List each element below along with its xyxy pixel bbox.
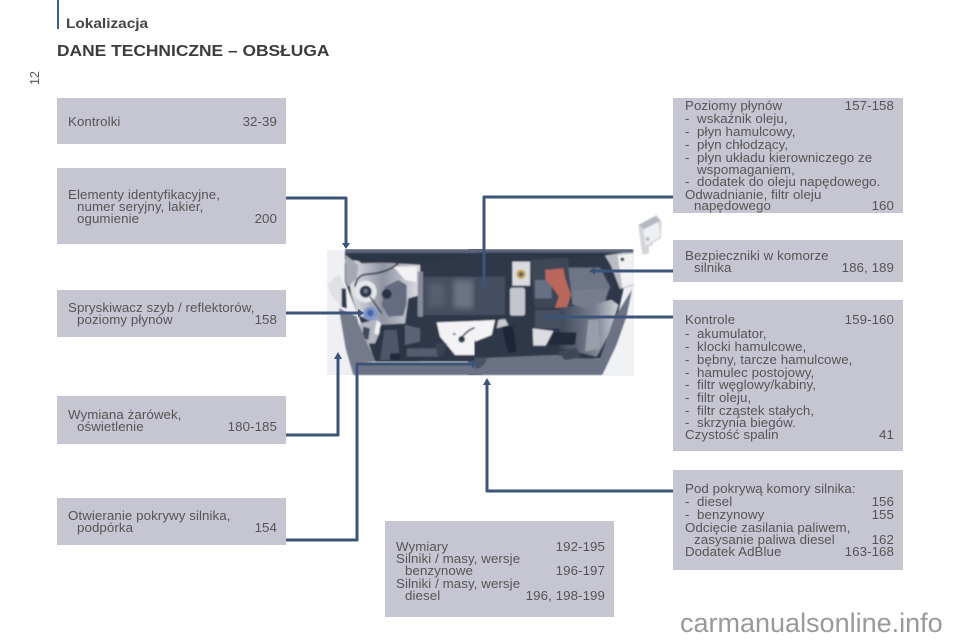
section label: Lokalizacja [66, 16, 148, 31]
panel: Elementy identyfikacyjne [57, 168, 286, 244]
panel: Poziomy płynów: - płyn układu kierowniczego ze [685, 150, 872, 165]
panel: Kontrole: Czystość spalin [685, 427, 779, 442]
arrow heads [334, 243, 595, 385]
panel: Wymiary: benzynowe [405, 563, 473, 578]
panel: Otwieranie pokrywy silnika: 154 [255, 520, 277, 535]
top band [358, 260, 385, 264]
panel: Poziomy płynów: wspomaganiem, [697, 162, 795, 177]
reservoir cap [512, 262, 530, 286]
panel: Bezpieczniki: silnika [694, 260, 732, 275]
panel: Pod pokrywą komory silnika: 156 [872, 494, 894, 509]
page edge line [57, 0, 59, 29]
panel: Bezpieczniki [673, 240, 903, 282]
panel: Wymiana żarówek: 180-185 [228, 419, 277, 434]
panel: Poziomy płynów: Odwadnianie, filtr oleju [685, 187, 821, 202]
panel: Poziomy płynów: - płyn chłodzący, [685, 137, 788, 152]
panel: Poziomy płynów: napędowego [694, 198, 771, 213]
panel: Otwieranie pokrywy silnika: podpórka [77, 520, 133, 535]
panel: Otwieranie pokrywy silnika [57, 498, 286, 545]
panel: Pod pokrywą komory silnika: - diesel [685, 494, 732, 509]
battery [530, 258, 571, 308]
panel: Poziomy płynów [673, 98, 903, 213]
right half of the bay [475, 249, 637, 377]
panel: Kontrole: 159-160 [845, 312, 894, 327]
panel: Wymiary: 196-197 [556, 563, 605, 578]
washer reservoir [358, 320, 380, 343]
panel: Spryskiwacz szyb [57, 290, 286, 337]
panel: Elementy identyfikacyjne: 200 [255, 211, 277, 226]
panel: Poziomy płynów: - płyn hamulcowy, [685, 124, 796, 139]
page number: 12 [28, 71, 42, 85]
left half of the bay [328, 249, 475, 375]
panel: Kontrole: - filtr cząstek stałych, [685, 403, 814, 418]
panel: Spryskiwacz szyb: poziomy płynów [77, 312, 173, 327]
panel: Poziomy płynów: - dodatek do oleju napędowego. [685, 174, 880, 189]
front panel [358, 364, 475, 375]
connector lines [285, 197, 673, 540]
panel: Bezpieczniki: 186, 189 [842, 260, 894, 275]
panel: Otwieranie pokrywy silnika: Otwieranie pokrywy silnika, [68, 508, 231, 523]
base [327, 250, 634, 375]
panel: Elementy identyfikacyjne: ogumienie [77, 211, 139, 226]
panel: Wymiary: Silniki / masy, wersje [396, 576, 520, 591]
panel: Wymiary: Wymiary [396, 539, 448, 554]
panel: Kontrolki [57, 98, 286, 144]
panel: Pod pokrywą komory silnika: - benzynowy [685, 507, 764, 522]
title: DANE TECHNICZNE – OBSŁUGA [57, 43, 329, 60]
panel: Kontrole: Kontrole [685, 312, 735, 327]
panel: Pod pokrywą komory silnika: Dodatek AdBlue [685, 544, 781, 559]
panel: Kontrole: - bębny, tarcze hamulcowe, [685, 352, 852, 367]
panel: Wymiary: 196, 198-199 [526, 588, 605, 603]
panel: Wymiana żarówek [57, 396, 286, 444]
panel: Pod pokrywą komory silnika: 155 [872, 507, 894, 522]
red battery cover [545, 268, 571, 308]
panel: Kontrole: - hamulec postojowy, [685, 365, 814, 380]
lower block [535, 310, 562, 328]
panel: Kontrole: - filtr węglowy/kabiny, [685, 377, 816, 392]
top band [475, 249, 633, 258]
panel: Bezpieczniki: Bezpieczniki w komorze [685, 248, 829, 263]
panel: Wymiana żarówek: Wymiana żarówek, [68, 407, 181, 422]
right engine bay gradient [560, 300, 618, 357]
panel: Pod pokrywą komory silnika: zasysanie paliwa diesel [694, 532, 835, 547]
watermark: carmanualsonline.info [680, 608, 943, 638]
panel: Pod pokrywą komory silnika: Odcięcie zasilania paliwem, [685, 520, 850, 535]
panel: Pod pokrywą komory silnika [673, 470, 903, 570]
panel: Wymiary: 192-195 [556, 539, 605, 554]
fluid reservoir tube [510, 288, 525, 316]
icon: fuse [638, 215, 662, 255]
panel: Pod pokrywą komory silnika: 163-168 [845, 544, 894, 559]
panel: Pod pokrywą komory silnika: Pod pokrywą komory silnika: [685, 481, 856, 496]
front panel [475, 289, 632, 375]
fuse box lid [568, 268, 610, 308]
engine bay illustration and connectors [286, 196, 673, 542]
panel: Kontrole: - filtr oleju, [685, 390, 751, 405]
panel: Poziomy płynów: 160 [872, 198, 894, 213]
panel: Poziomy płynów: Poziomy płynów [685, 98, 782, 113]
panel: Kontrolki: 32-39 [243, 114, 277, 129]
panel: Poziomy płynów: 157-158 [845, 98, 894, 113]
panel: Spryskiwacz szyb: 158 [255, 312, 277, 327]
panel: Kontrole: 41 [879, 427, 894, 442]
panel: Wymiary: Silniki / masy, wersje [396, 551, 520, 566]
panel: Wymiana żarówek: oświetlenie [77, 419, 144, 434]
panel: Pod pokrywą komory silnika: 162 [872, 532, 894, 547]
panel: Spryskiwacz szyb: Spryskiwacz szyb / reflektorów, [68, 300, 254, 315]
panel: Kontrole: - akumulator, [685, 326, 767, 341]
panel: Kontrole: - klocki hamulcowe, [685, 339, 806, 354]
panel: Wymiary [385, 521, 614, 617]
panel: Elementy identyfikacyjne: numer seryjny, lakier, [77, 199, 203, 214]
bonnet latch [558, 348, 581, 360]
panel: Kontrolki: Kontrolki [68, 114, 120, 129]
centre backing [468, 249, 482, 375]
panel: Wymiary: diesel [405, 588, 440, 603]
panel: Poziomy płynów: - wskaźnik oleju, [685, 111, 788, 126]
panel: Kontrole: - skrzynia biegów. [685, 415, 796, 430]
right upper wing [605, 251, 633, 289]
panel: Kontrole [673, 300, 903, 451]
left wing panel [339, 308, 376, 375]
panel: Elementy identyfikacyjne: Elementy identyfikacyjne, [68, 187, 220, 202]
